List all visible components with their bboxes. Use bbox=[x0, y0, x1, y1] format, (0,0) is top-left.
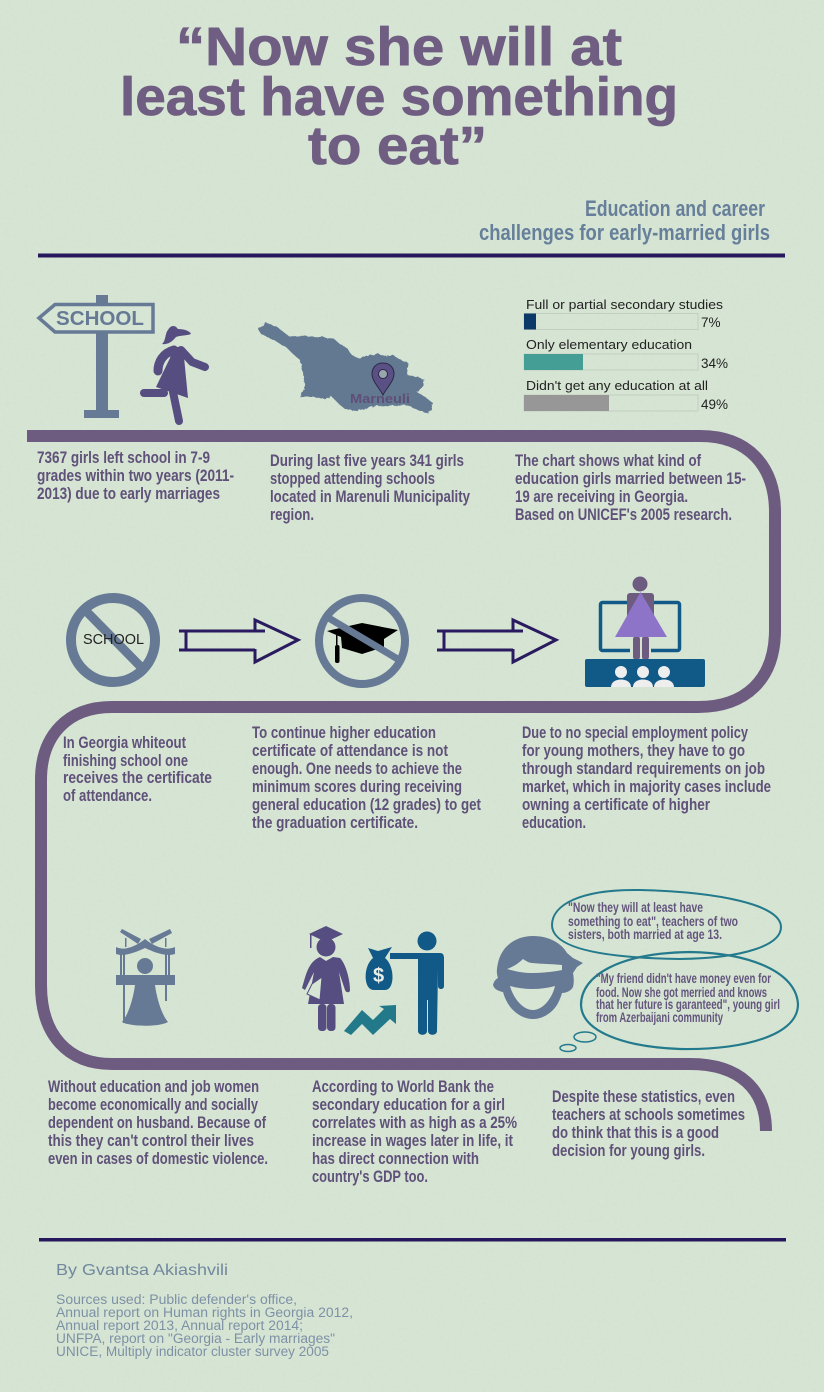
icon: puppet on strings bbox=[116, 929, 175, 1026]
text: teachers' opinion: do think that this is a good bbox=[552, 1123, 719, 1142]
text: teachers' opinion bbox=[552, 1087, 745, 1160]
text: graduation certificate: minimum scores during receiving bbox=[252, 777, 462, 796]
text: World Bank wage statistic: According to World Bank the bbox=[312, 1077, 494, 1096]
text: Marneuli dropouts: stopped attending schools bbox=[270, 469, 435, 488]
arrow: certificate to job market bbox=[437, 620, 556, 662]
text: graduation certificate: To continue higher education bbox=[252, 723, 436, 742]
text: employment policy: for young mothers, they have to go bbox=[522, 741, 745, 760]
text: graduation certificate: general education (12 grades) to get bbox=[252, 795, 481, 814]
text: World Bank wage statistic: secondary education for a girl bbox=[312, 1095, 505, 1114]
speech bubble: teachers quote: "Now they will at least have bbox=[568, 900, 703, 915]
icon: map of Georgia with Marneuli pin bbox=[258, 323, 433, 413]
text: economic dependence: dependent on husband. Because of bbox=[48, 1113, 266, 1132]
icon: face with thought bubbles bbox=[493, 936, 596, 1052]
text: Marneuli dropouts: located in Marenuli Municipality bbox=[270, 487, 470, 506]
icon: no school sign bbox=[71, 598, 155, 682]
bar: secondary studies 7%: Full or partial secondary studies bbox=[526, 297, 724, 312]
text: certificate of attendance: In Georgia whiteout bbox=[63, 733, 186, 752]
subtitle bbox=[479, 196, 770, 245]
icon: money bag and man: $ bbox=[373, 965, 384, 987]
text: certificate of attendance: receives the certificate bbox=[63, 768, 212, 787]
text: chart explanation: 19 are receiving in Georgia. bbox=[515, 487, 688, 506]
sources bbox=[56, 1292, 353, 1359]
text: graduation certificate: the graduation certificate. bbox=[252, 813, 418, 832]
text: Marneuli dropouts bbox=[270, 451, 470, 524]
text: employment policy: through standard requirements on job bbox=[522, 759, 765, 778]
author credit: By Gvantsa Akiashvili bbox=[56, 1262, 228, 1279]
sources: Annual report 2013, Annual report 2014; bbox=[56, 1318, 303, 1333]
text: economic dependence bbox=[48, 1077, 268, 1168]
arrow: school to certificate bbox=[179, 620, 298, 662]
text: economic dependence: even in cases of domestic violence. bbox=[48, 1149, 268, 1168]
bar: no education 49% bbox=[524, 378, 728, 412]
bar: no education 49%: Didn't get any education at all bbox=[526, 378, 708, 393]
text: Marneuli dropouts: region. bbox=[270, 505, 314, 524]
icon: no school sign: SCHOOL bbox=[83, 631, 144, 648]
icon: rising trend arrow bbox=[344, 1005, 396, 1035]
text: employment policy: Due to no special employment policy bbox=[522, 723, 748, 742]
text: economic dependence: become economically and socially bbox=[48, 1095, 258, 1114]
subtitle: Education and career bbox=[585, 196, 765, 221]
text: World Bank wage statistic bbox=[312, 1077, 517, 1186]
icon: graduate girl with book bbox=[302, 926, 350, 1031]
text: graduation certificate: certificate of attendance is not bbox=[252, 741, 448, 760]
title: least have something bbox=[120, 67, 678, 127]
bar: elementary education 34%: 34% bbox=[701, 356, 728, 371]
text: chart explanation: education girls married between 15- bbox=[515, 469, 746, 488]
icon: map of Georgia with Marneuli pin: Marneuli bbox=[350, 391, 410, 406]
title: “Now she will at bbox=[176, 17, 622, 77]
text: Marneuli dropouts: During last five years 341 girls bbox=[270, 451, 464, 470]
icon: teacher at a board with audience bbox=[585, 576, 705, 687]
bar: secondary studies 7% bbox=[524, 297, 724, 330]
sources: Sources used: Public defender's office, bbox=[56, 1292, 297, 1307]
text: certificate of attendance bbox=[63, 733, 212, 805]
text: employment policy bbox=[522, 723, 771, 832]
text: certificate of attendance: of attendance. bbox=[63, 786, 152, 805]
speech bubble: young girl quote: from Azerbaijani community bbox=[596, 1010, 723, 1025]
text: World Bank wage statistic: increase in wages later in life, it bbox=[312, 1131, 513, 1150]
text: employment policy: owning a certificate of higher bbox=[522, 795, 710, 814]
text: World Bank wage statistic: country's GDP too. bbox=[312, 1167, 428, 1186]
sources: UNICE, Multiply indicator cluster survey 2005 bbox=[56, 1344, 329, 1359]
icon: money bag and man bbox=[366, 932, 444, 1035]
text: graduation certificate: enough. One needs to achieve the bbox=[252, 759, 462, 778]
text: graduation certificate bbox=[252, 723, 481, 832]
text: girls left school: 7367 girls left school in 7-9 bbox=[37, 448, 210, 467]
text: girls left school: grades within two years (2011- bbox=[37, 466, 234, 485]
title bbox=[120, 17, 678, 176]
text: employment policy: education. bbox=[522, 813, 586, 832]
text: certificate of attendance: finishing school one bbox=[63, 751, 188, 770]
text: girls left school bbox=[37, 448, 234, 503]
text: chart explanation: The chart shows what kind of bbox=[515, 451, 701, 470]
subtitle: challenges for early-married girls bbox=[479, 220, 770, 245]
icon: school sign bbox=[39, 295, 153, 418]
text: chart explanation: Based on UNICEF's 2005 research. bbox=[515, 505, 732, 524]
sources: Annual report on Human rights in Georgia 2012, bbox=[56, 1305, 353, 1320]
text: World Bank wage statistic: has direct connection with bbox=[312, 1149, 479, 1168]
icon: running girl bbox=[144, 326, 205, 421]
bar: elementary education 34% bbox=[524, 337, 728, 371]
speech bubble: young girl quote bbox=[581, 952, 798, 1049]
speech bubble: teachers quote bbox=[552, 890, 781, 959]
title: to eat” bbox=[308, 116, 487, 176]
icon: school sign: SCHOOL bbox=[56, 308, 144, 330]
sources: UNFPA, report on "Georgia - Early marriages" bbox=[56, 1331, 335, 1346]
speech bubble: teachers quote: something to eat", teachers of two bbox=[568, 914, 738, 929]
text: girls left school: 2013) due to early marriages bbox=[37, 484, 220, 503]
text: teachers' opinion: teachers at schools sometimes bbox=[552, 1105, 745, 1124]
text: chart explanation bbox=[515, 451, 746, 524]
text: economic dependence: this they can't control their lives bbox=[48, 1131, 254, 1150]
text: World Bank wage statistic: correlates with as high as a 25% bbox=[312, 1113, 517, 1132]
text: teachers' opinion: decision for young girls. bbox=[552, 1141, 705, 1160]
bar: elementary education 34%: Only elementary education bbox=[526, 337, 692, 352]
bar: no education 49%: 49% bbox=[701, 397, 728, 412]
bar chart: education of married girls bbox=[524, 297, 728, 412]
text: teachers' opinion: Despite these statistics, even bbox=[552, 1087, 735, 1106]
icon: no graduation cap bbox=[319, 598, 405, 684]
winding path connecting the story bbox=[27, 436, 775, 1131]
bar: secondary studies 7%: 7% bbox=[701, 315, 721, 330]
text: economic dependence: Without education and job women bbox=[48, 1077, 259, 1096]
speech bubble: teachers quote: sisters, both married at age 13. bbox=[568, 927, 722, 942]
